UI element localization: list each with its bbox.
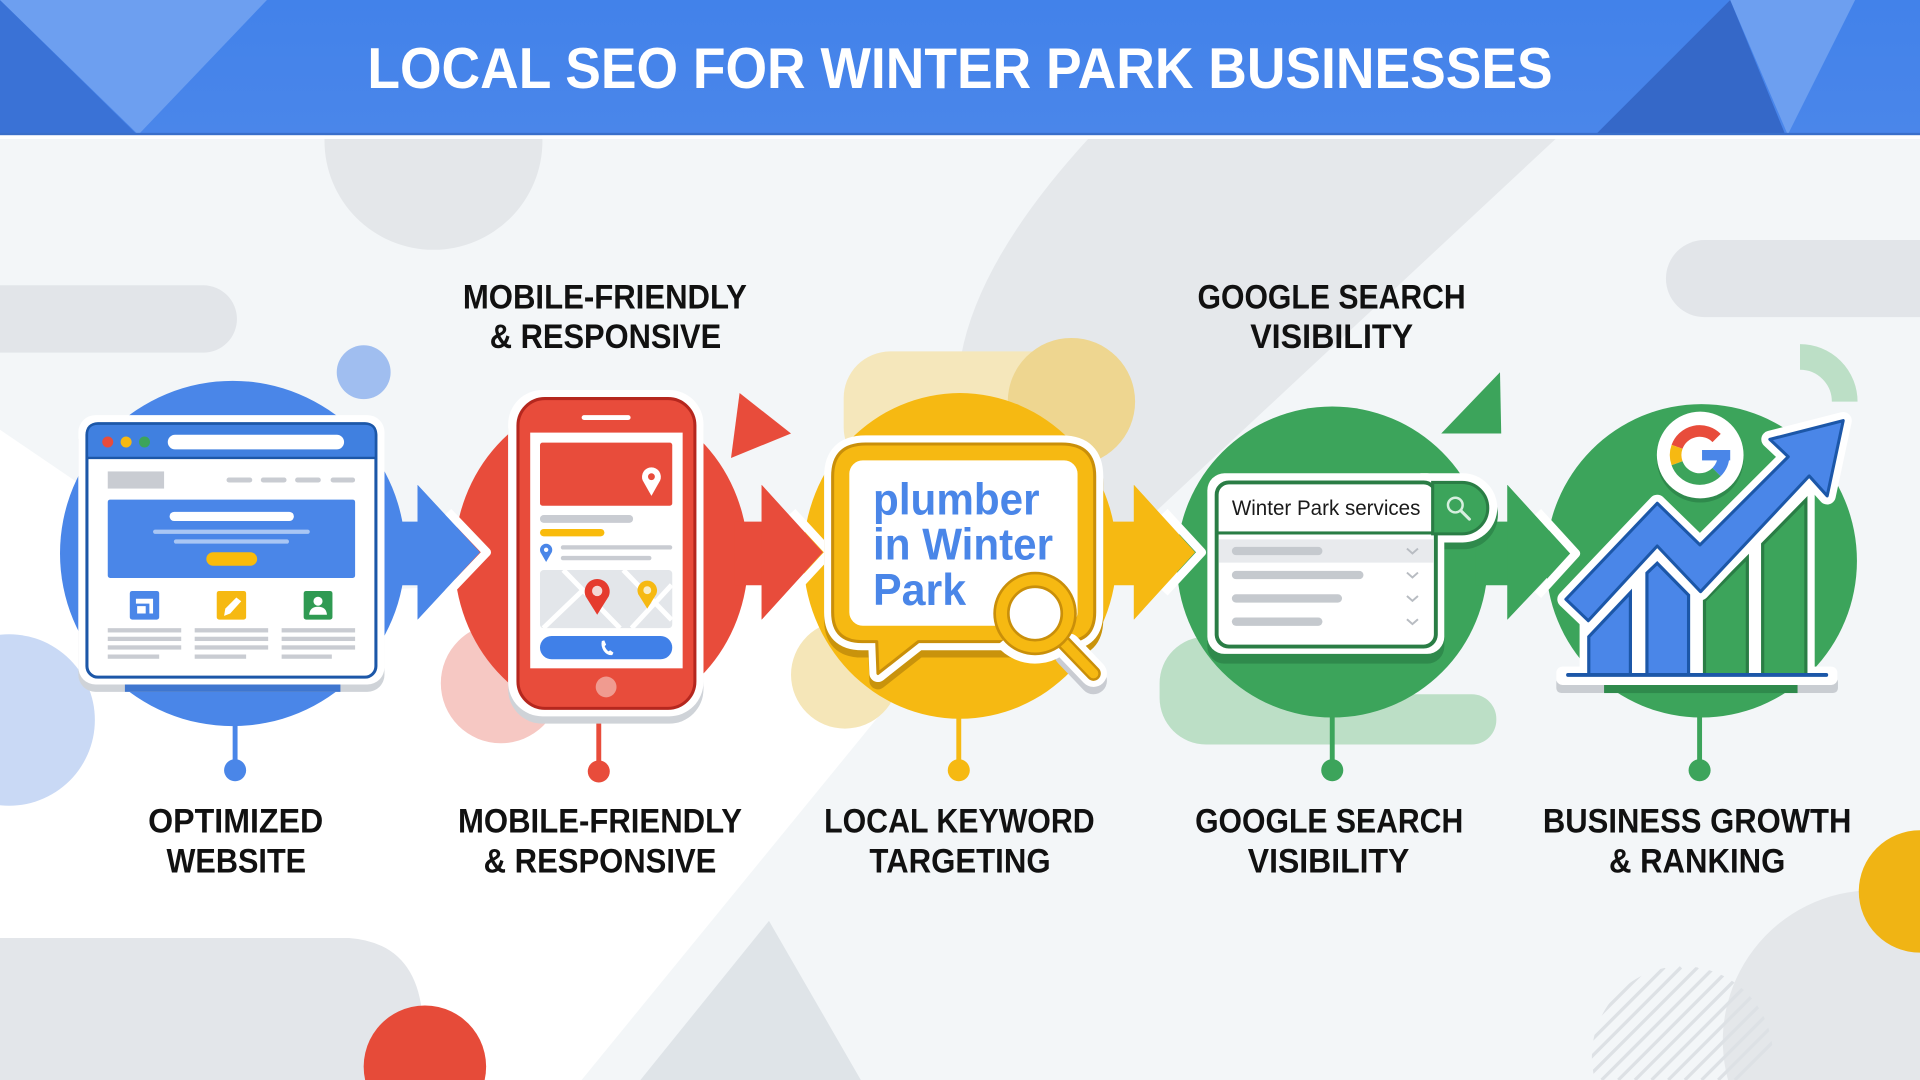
step 3: circle and arrow [762, 393, 1195, 781]
top label: mobile-friendly [463, 279, 747, 356]
label: business growth and ranking: BUSINESS GROWTH [1543, 803, 1851, 841]
result rows [1232, 547, 1418, 626]
keyword text: Park [873, 566, 967, 615]
label: google search visibility: VISIBILITY [1248, 842, 1410, 880]
label: mobile-friendly and responsive: & RESPONSIVE [484, 842, 716, 880]
icon: speech bubble with keyword [833, 444, 1095, 681]
keyword text: plumber [873, 475, 1040, 524]
label: google search visibility [1195, 803, 1463, 880]
label: local keyword targeting [824, 803, 1095, 880]
title banner [0, 0, 1920, 139]
keyword text: in Winter [873, 521, 1053, 570]
search icon [1448, 498, 1469, 519]
label: google search visibility: GOOGLE SEARCH [1195, 803, 1463, 841]
step 4: circle and arrow [1134, 407, 1570, 781]
icon: growth chart with arrow [1556, 412, 1843, 693]
label: mobile-friendly and responsive [458, 803, 742, 880]
step 1: circle and arrow [60, 381, 480, 781]
step 2: circle and arrow [418, 398, 823, 782]
keyword text [873, 475, 1053, 615]
label: mobile-friendly and responsive: MOBILE-FRIENDLY [458, 803, 742, 841]
icon: smartphone [508, 390, 703, 724]
google badge [1657, 412, 1744, 503]
label: business growth and ranking [1543, 803, 1851, 880]
icon: browser window [78, 415, 384, 692]
top label: google search visibility: VISIBILITY [1250, 318, 1413, 356]
top label: google search visibility: GOOGLE SEARCH [1198, 279, 1466, 317]
top label: mobile-friendly: MOBILE-FRIENDLY [463, 279, 747, 317]
label: optimized website: OPTIMIZED [148, 803, 323, 841]
search query text: Winter Park services [1232, 497, 1420, 520]
icon: search results card [1207, 473, 1498, 664]
title: LOCAL SEO FOR WINTER PARK BUSINESSES [367, 37, 1553, 101]
label: business growth and ranking: & RANKING [1609, 842, 1785, 880]
magnifying glass [995, 573, 1093, 681]
growth arrow [1566, 421, 1843, 621]
top label: google search visibility [1198, 279, 1466, 356]
label: local keyword targeting: TARGETING [869, 842, 1051, 880]
label: optimized website: WEBSITE [167, 842, 306, 880]
step 5: circle [1507, 404, 1857, 781]
label: local keyword targeting: LOCAL KEYWORD [824, 803, 1095, 841]
bars [1589, 500, 1806, 675]
top label: mobile-friendly: & RESPONSIVE [490, 318, 721, 356]
label: optimized website [148, 803, 323, 880]
